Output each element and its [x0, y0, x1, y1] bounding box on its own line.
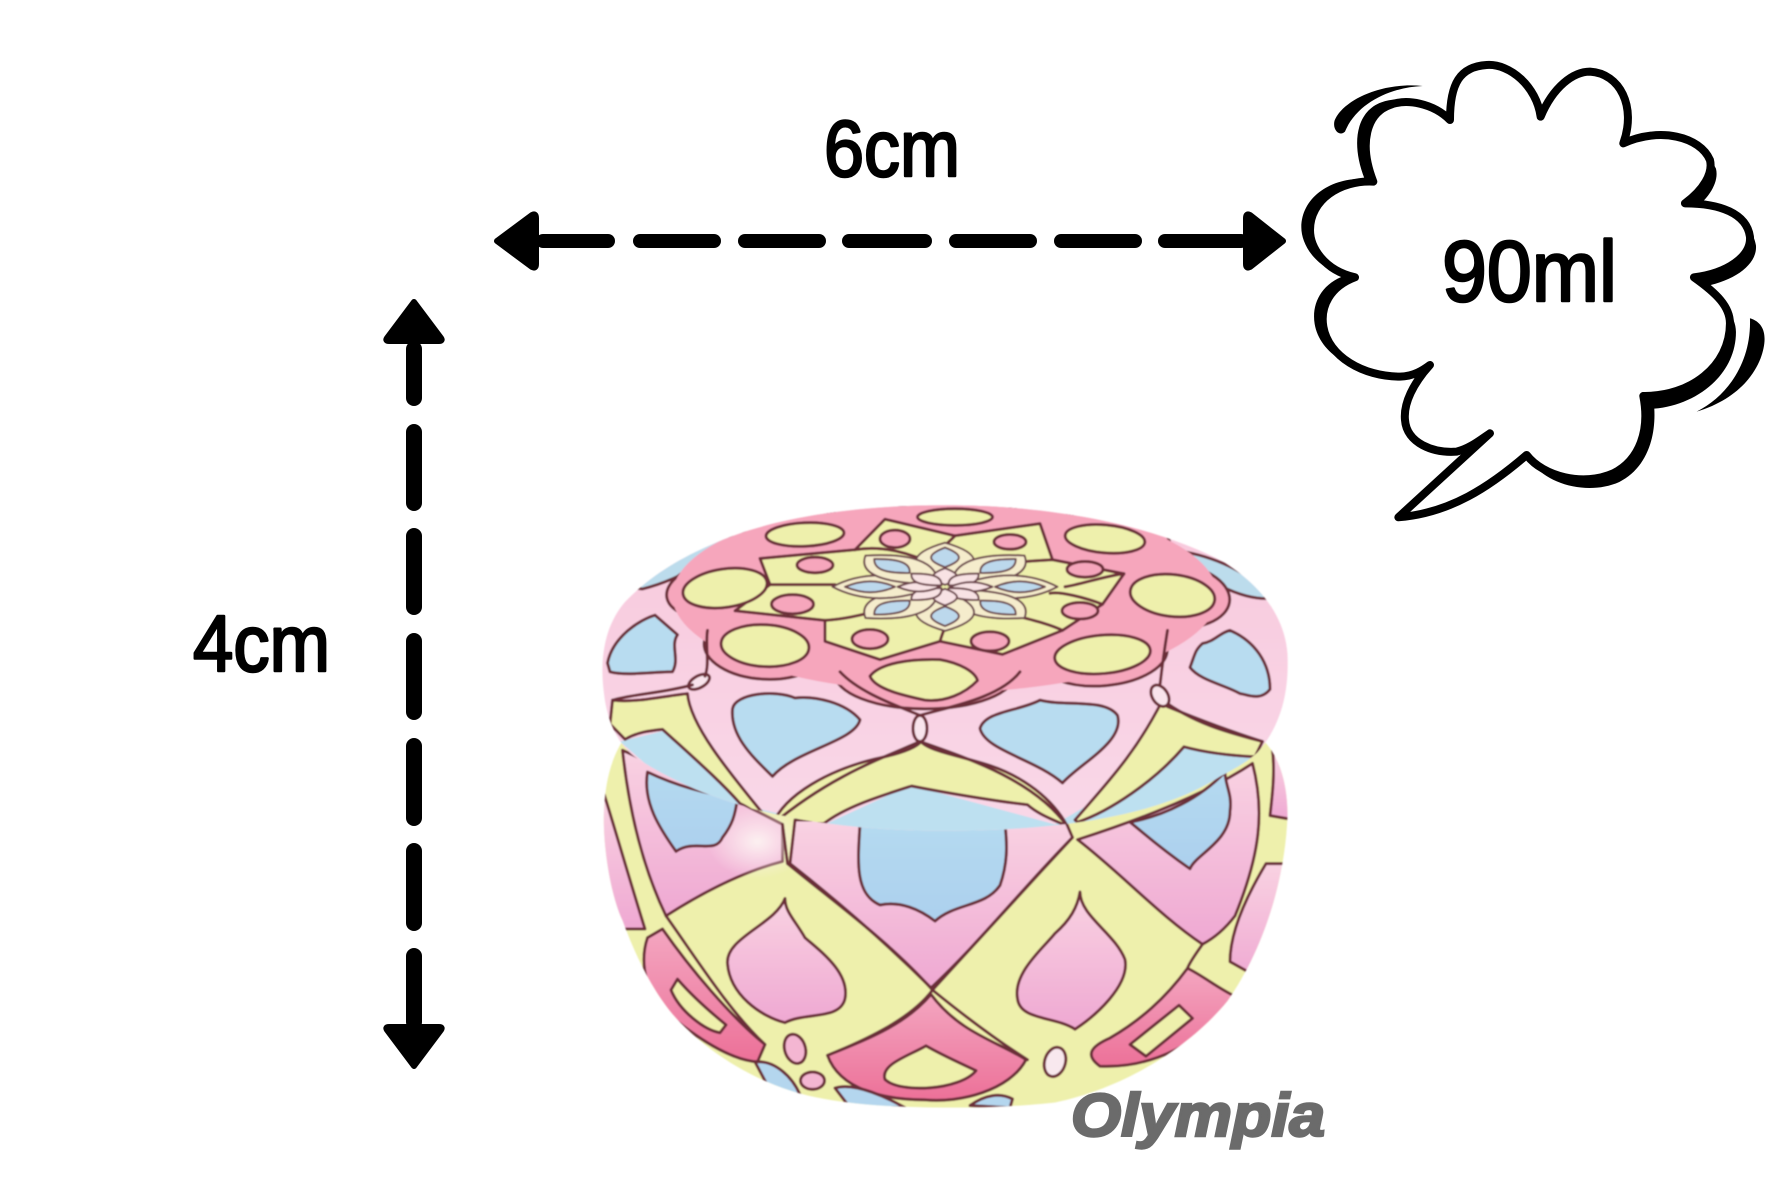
star cell lines	[770, 536, 1124, 641]
tin body	[590, 733, 1310, 1116]
lid lattice lines	[612, 630, 1262, 827]
yellow inset left	[671, 979, 726, 1033]
brand watermark: Olympia: Olympia	[1071, 1082, 1325, 1149]
mandala centre petals	[832, 543, 1058, 631]
outer eye petals	[832, 543, 1058, 631]
lid eye left	[685, 671, 713, 692]
far right pink	[1228, 861, 1284, 972]
pale centre petals	[898, 568, 992, 605]
label: 90ml: 90ml	[1442, 224, 1617, 320]
body blue petal centre	[858, 824, 1006, 921]
rose right	[1091, 968, 1240, 1066]
yellow band right	[1075, 700, 1262, 822]
yellow band centre	[772, 742, 1068, 827]
lid blue petal far left	[608, 615, 678, 674]
small oval right	[1041, 1046, 1069, 1078]
bubble outline	[1310, 65, 1750, 517]
bubble thick shadow, left side	[1301, 99, 1515, 374]
lattice lines	[666, 824, 1202, 1060]
vertical 4cm dimension arrow	[386, 302, 442, 1066]
lid lattice eyes	[913, 715, 927, 742]
tin illustration	[590, 497, 1310, 1116]
rose ring infill	[672, 499, 1218, 692]
lid corners pale blue right	[1185, 552, 1270, 599]
lid blue petal centre right	[980, 700, 1118, 783]
yellow inner diamond	[884, 1046, 976, 1088]
small pink ovals	[772, 530, 1103, 651]
body right pink panel	[1078, 763, 1259, 944]
speech bubble: 90ml	[1301, 65, 1765, 517]
body blue petal left	[647, 772, 738, 851]
label: 4cm: 4cm	[193, 599, 330, 688]
body highlight	[716, 809, 793, 876]
pink teardrop left	[727, 898, 846, 1023]
horizontal 6cm dimension arrow	[497, 214, 1283, 268]
rose scallops around ovals	[661, 500, 1235, 709]
rose left	[644, 929, 765, 1062]
yellow star	[735, 519, 1124, 660]
far right rose sliver	[1268, 750, 1288, 821]
lid blue petal centre left	[732, 694, 860, 776]
body blue petal right	[1130, 772, 1231, 869]
lid corners pale blue left	[637, 542, 716, 592]
lid blue petal far right	[1190, 630, 1270, 696]
swoosh: bottom right	[1697, 318, 1765, 412]
label: 6cm: 6cm	[824, 104, 960, 193]
pink teardrop right	[1017, 892, 1125, 1029]
rose diamond bottom	[828, 994, 1026, 1100]
blue inner petals	[845, 548, 1045, 626]
yellow ovals	[679, 509, 1218, 700]
small ovals	[781, 1032, 809, 1065]
yellow inset right	[1130, 1005, 1192, 1056]
lid rim blue lip	[620, 731, 1265, 831]
body centre pink diamond	[790, 820, 1072, 988]
swoosh: top left	[1334, 85, 1423, 133]
lid eye right	[1147, 683, 1173, 709]
tin lid	[590, 497, 1300, 837]
far left pink	[595, 794, 645, 929]
yellow band left	[610, 694, 770, 822]
small oval low	[800, 1072, 824, 1089]
body left pink panel	[622, 750, 782, 916]
bubble thick shadow, right side	[1529, 144, 1756, 488]
bottom blue pieces	[755, 1062, 1012, 1108]
